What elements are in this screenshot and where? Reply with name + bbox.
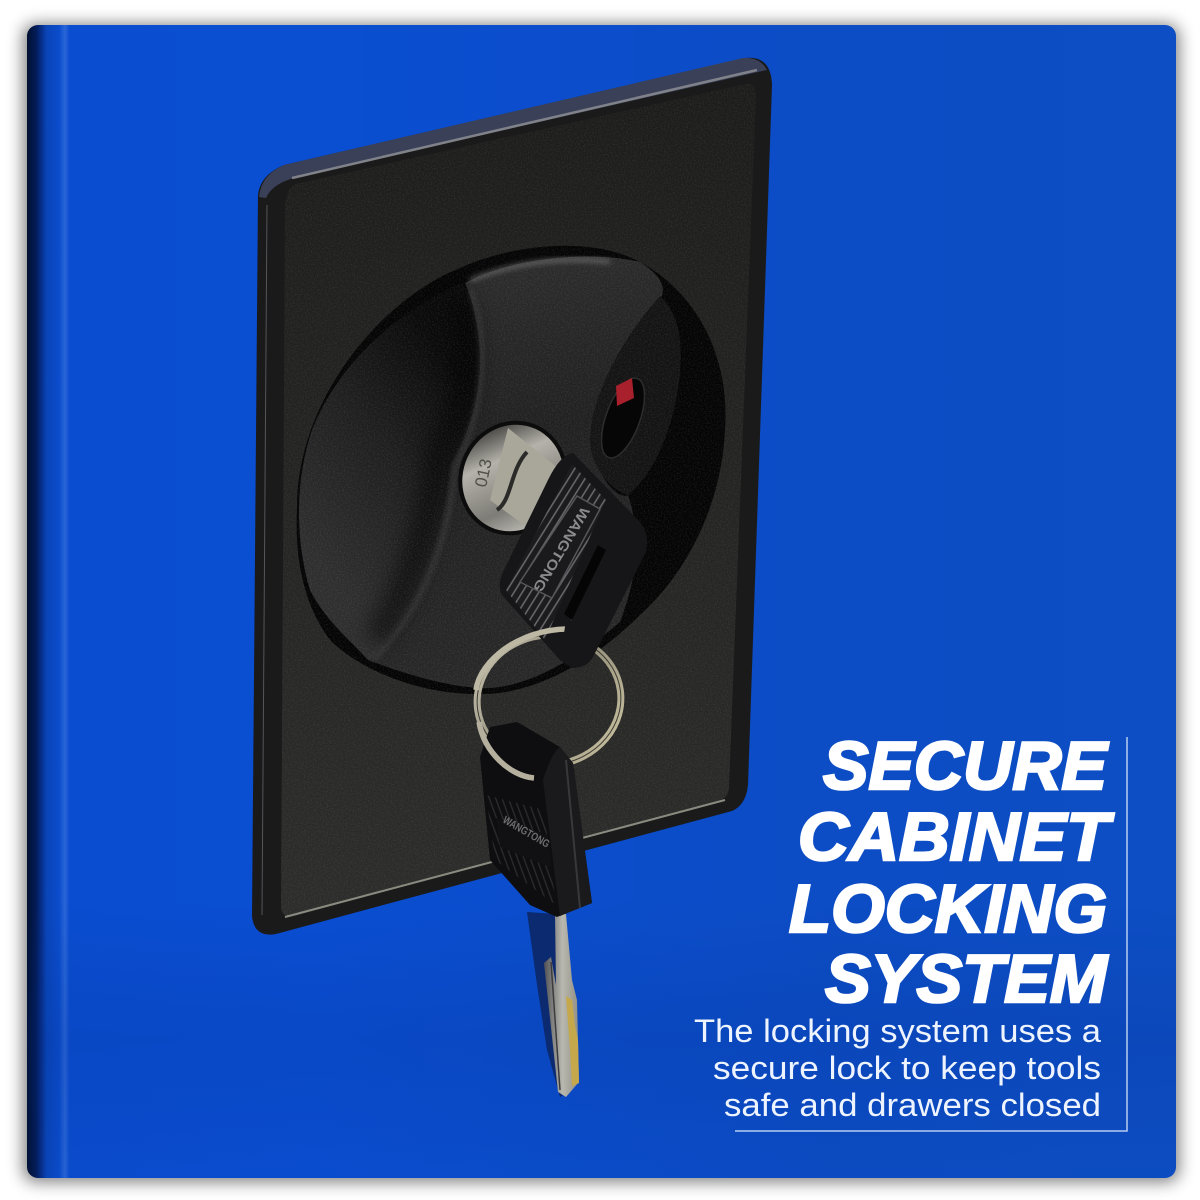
text frame corner [735, 737, 1127, 1131]
heading: LOCKING [789, 871, 1107, 947]
top rim highlight [470, 260, 610, 280]
description [694, 1013, 1101, 1123]
lower key brand: WANGTONG [500, 814, 552, 851]
plate face [281, 84, 756, 916]
left grip scoop [299, 283, 480, 660]
blade teeth [566, 996, 579, 1086]
lower key [480, 722, 592, 917]
key ring [469, 626, 629, 774]
key blade shadow [527, 912, 572, 1097]
left grip ridge highlight [372, 290, 482, 660]
indicator window [593, 373, 653, 463]
key blade [544, 914, 579, 1097]
red indicator [616, 378, 634, 406]
key ring overlap [476, 629, 566, 690]
heading: SYSTEM [825, 941, 1108, 1017]
key side face [543, 747, 592, 916]
lock handle recess [297, 246, 726, 694]
right grip scoop [590, 296, 681, 495]
upper key tip over ring [560, 620, 606, 668]
left grip shadow band [375, 295, 467, 640]
key brand: WANGTONG [530, 504, 593, 595]
description: secure lock to keep tools [713, 1050, 1101, 1086]
description: safe and drawers closed [724, 1087, 1101, 1123]
cylinder code: 013 [471, 457, 496, 489]
heading: SECURE [823, 728, 1110, 804]
handle grain [295, 240, 730, 700]
key cylinder [440, 403, 586, 553]
upper key head [500, 453, 647, 668]
key ring lower loop through fob [479, 722, 534, 778]
heading [789, 728, 1115, 1017]
heading: CABINET [798, 799, 1115, 875]
rotary lock handle [295, 240, 730, 700]
description: The locking system uses a [694, 1013, 1101, 1049]
lock plate [250, 58, 772, 940]
